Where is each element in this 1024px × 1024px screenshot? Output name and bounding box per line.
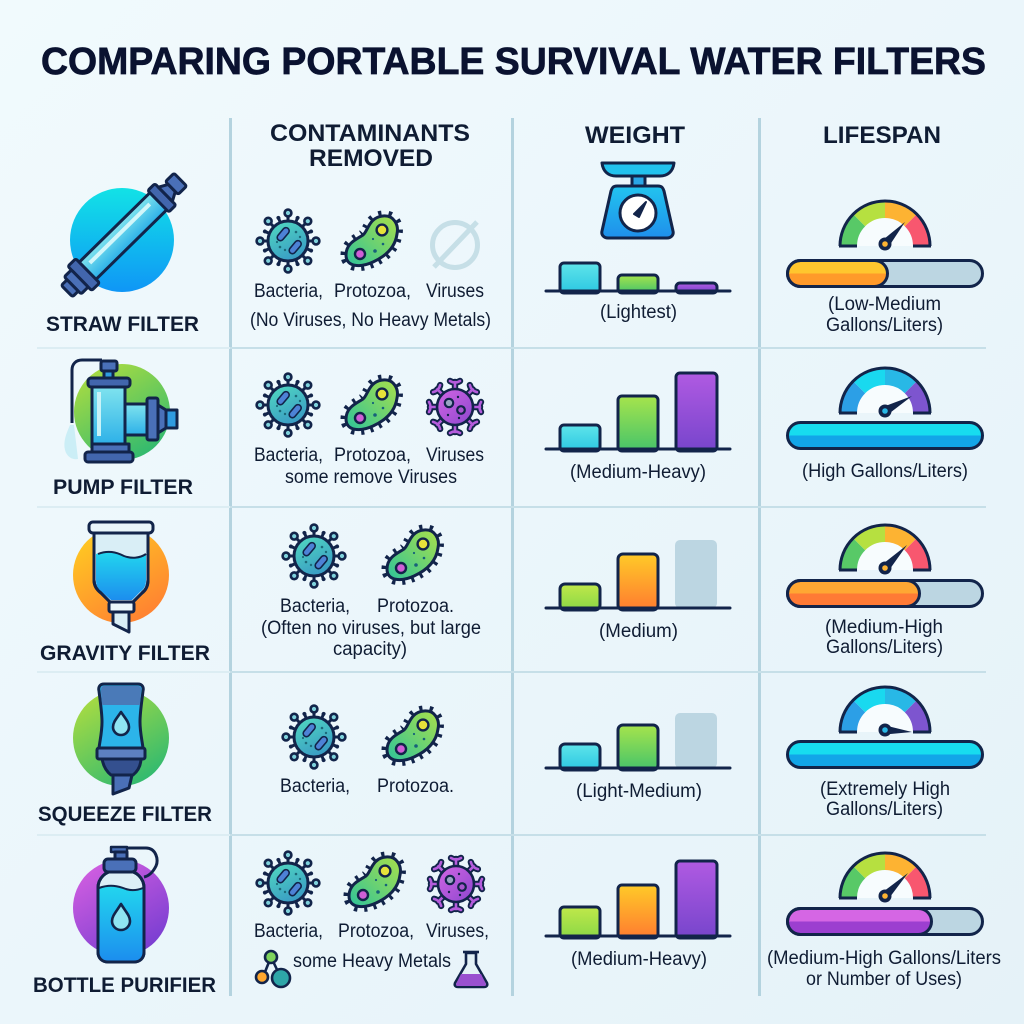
- row: pump filter: [53, 360, 982, 499]
- label: pump filter: PUMP FILTER: [53, 476, 193, 499]
- lifespan progress bar: [788, 580, 982, 606]
- column heading: contaminants removed: REMOVED: [309, 145, 433, 172]
- column heading: weight: WEIGHT: [585, 122, 685, 149]
- contaminant icons: straw filter: [257, 210, 478, 272]
- weight bar chart: light-medium: [546, 713, 730, 770]
- contaminant icons: squeeze filter: [283, 706, 438, 768]
- contaminant text: bottle purifier: some Heavy Metals: [293, 951, 451, 972]
- lifespan text: (High Gallons/Liters): [802, 461, 968, 482]
- row: bottle purifier: [33, 847, 1001, 997]
- label: gravity filter: GRAVITY FILTER: [40, 642, 210, 665]
- contaminant text: straw filter: Protozoa,: [334, 281, 411, 302]
- lifespan gauge: [839, 368, 931, 418]
- column heading: contaminants removed: [270, 120, 470, 172]
- contaminant text: pump filter: Protozoa,: [334, 445, 411, 466]
- weight bar chart: medium-heavy: [546, 861, 730, 938]
- lifespan text: Gallons/Liters): [826, 315, 943, 336]
- lifespan progress bar: [788, 742, 982, 768]
- title: COMPARING PORTABLE SURVIVAL WATER FILTERS: [41, 41, 986, 83]
- weight bar chart: lightest: [546, 263, 730, 293]
- contaminant text: gravity filter: Protozoa.: [377, 596, 454, 617]
- icon: bottle purifier: [73, 847, 169, 962]
- contaminant text: pump filter: Bacteria,: [254, 445, 323, 466]
- contaminant text: bottle purifier: Protozoa,: [338, 921, 414, 942]
- contaminant text: pump filter: [254, 445, 484, 488]
- contaminant text: squeeze filter: Bacteria,: [280, 776, 350, 797]
- contaminant icons: pump filter: [257, 374, 481, 436]
- row: gravity filter: [40, 522, 982, 665]
- weight label: (Medium-Heavy): [570, 462, 706, 483]
- contaminant text: pump filter: some remove Viruses: [285, 467, 457, 488]
- weight bar chart: medium: [546, 540, 730, 610]
- lifespan gauge: [839, 525, 931, 574]
- weight label: (Lightest): [600, 302, 677, 323]
- weight bar chart: medium-heavy: [546, 373, 730, 451]
- icon: kitchen scale: [602, 163, 674, 238]
- lifespan text: or Number of Uses): [806, 969, 962, 990]
- lifespan text: Gallons/Liters): [826, 799, 943, 820]
- contaminant text: straw filter: [250, 281, 491, 331]
- weight label: (Medium): [599, 621, 678, 642]
- label: squeeze filter: SQUEEZE FILTER: [38, 803, 212, 826]
- lifespan text: (Low-Medium: [828, 294, 941, 315]
- icon: squeeze filter: [73, 684, 169, 794]
- contaminant text: gravity filter: [261, 596, 481, 660]
- icon: flask: [455, 952, 487, 987]
- contaminant icons: bottle purifier: [257, 852, 482, 914]
- lifespan gauge: [839, 687, 931, 736]
- weight label: (Medium-Heavy): [571, 949, 707, 970]
- lifespan progress bar: [788, 260, 982, 286]
- lifespan text: [767, 948, 1001, 990]
- contaminant text: straw filter: Viruses: [426, 281, 484, 302]
- column heading: lifespan: LIFESPAN: [823, 122, 941, 149]
- contaminant text: gravity filter: (Often no viruses, but large: [261, 618, 481, 639]
- contaminant text: straw filter: (No Viruses, No Heavy Metals): [250, 310, 491, 331]
- lifespan text: (Medium-High Gallons/Liters: [767, 948, 1001, 969]
- lifespan text: (Extremely High: [820, 779, 950, 800]
- lifespan progress bar: [788, 908, 982, 934]
- contaminant text: bottle purifier: Bacteria,: [254, 921, 323, 942]
- icon: straw filter: [55, 168, 192, 303]
- contaminant text: pump filter: Viruses: [426, 445, 484, 466]
- row: squeeze filter: [38, 684, 982, 826]
- row: straw filter: [46, 168, 982, 336]
- lifespan text: [825, 617, 943, 658]
- contaminant text: squeeze filter: Protozoa.: [377, 776, 454, 797]
- contaminant text: straw filter: Bacteria,: [254, 281, 323, 302]
- lifespan text: (Medium-High: [825, 617, 943, 638]
- lifespan text: Gallons/Liters): [826, 637, 943, 658]
- contaminant text: gravity filter: capacity): [333, 639, 407, 660]
- lifespan gauge: [839, 853, 931, 902]
- label: bottle purifier: BOTTLE PURIFIER: [33, 974, 216, 997]
- lifespan text: [820, 779, 950, 820]
- contaminant text: squeeze filter: [280, 776, 454, 797]
- contaminant text: gravity filter: Bacteria,: [280, 596, 350, 617]
- contaminant text: bottle purifier: [254, 921, 489, 972]
- weight label: (Light-Medium): [576, 781, 702, 802]
- label: straw filter: STRAW FILTER: [46, 313, 199, 336]
- icon: pump filter: [64, 360, 177, 462]
- lifespan progress bar: [788, 422, 982, 448]
- lifespan text: [826, 294, 943, 336]
- icon: gravity filter: [73, 522, 169, 632]
- column heading: contaminants removed: CONTAMINANTS: [270, 120, 470, 147]
- contaminant text: bottle purifier: Viruses,: [426, 921, 489, 942]
- lifespan gauge: [839, 201, 931, 250]
- icon: heavy metal molecule: [256, 951, 290, 987]
- contaminant icons: gravity filter: [283, 525, 438, 587]
